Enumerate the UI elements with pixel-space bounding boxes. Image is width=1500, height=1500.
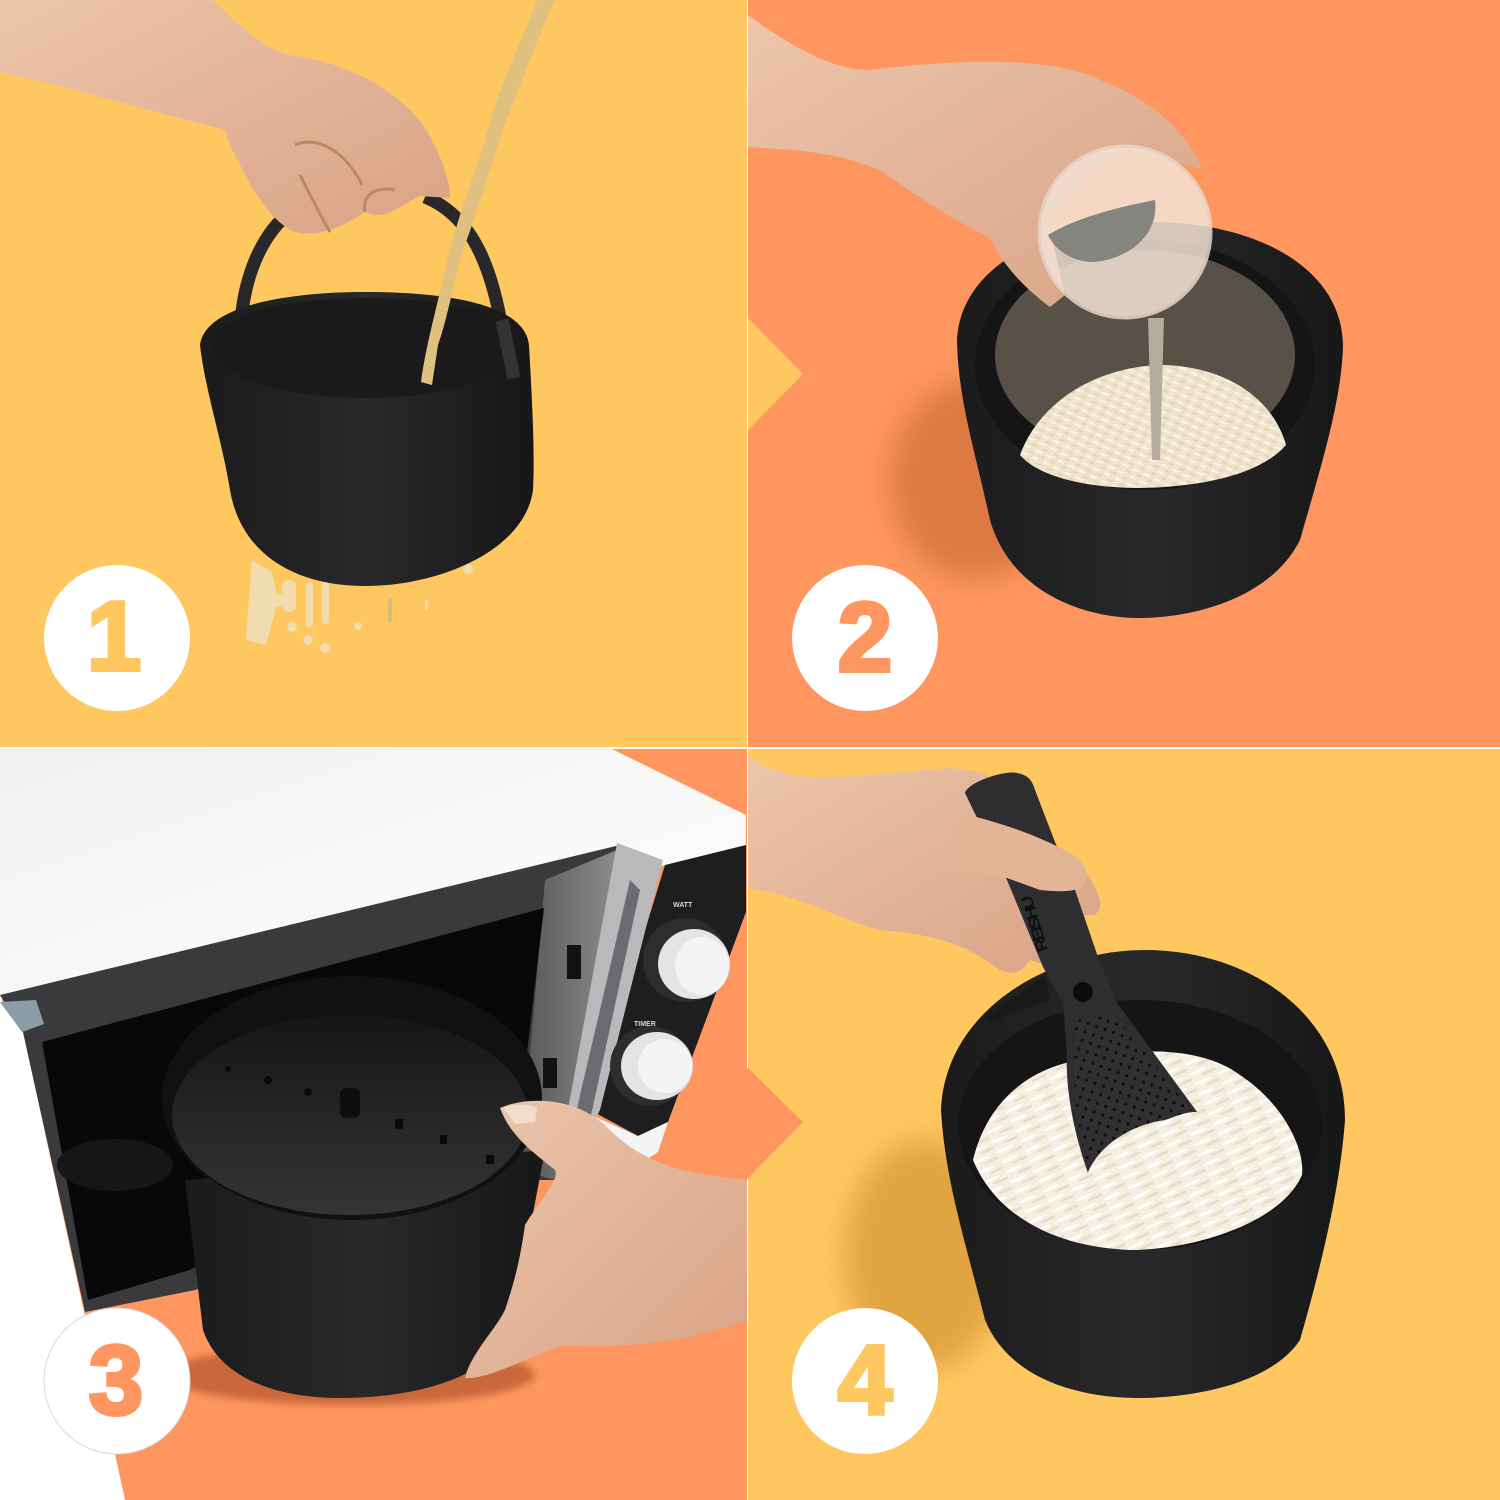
step badge 1 [44,565,190,711]
thumb [955,812,1087,891]
pot body [185,1150,545,1398]
pot shadow [165,1345,535,1405]
door recess [568,880,640,1150]
paddle perforated blade [1074,1015,1195,1165]
upper dial with label [643,902,730,1002]
step badge 4: 4 [838,1325,892,1435]
microwave top surface [0,749,746,1000]
lower dial with label [610,1021,693,1106]
pot lid [162,976,542,1220]
pot shadow [845,1140,1005,1370]
arm and hand [0,0,450,234]
silver door trim [555,843,663,1180]
pot body [957,222,1343,618]
upper dial with label: WATT [673,902,693,909]
illustration: step 4 serving rice [748,755,1345,1398]
illustration: step 3 microwave [0,749,747,1500]
measuring cup [1039,146,1211,318]
step badge 2 [792,565,938,711]
pot interior [212,298,518,398]
cooked rice [973,1051,1302,1250]
water pour [1148,318,1164,460]
panel: step 1 background [0,0,747,747]
step badge 4 [792,1308,938,1454]
step badge 3: 3 [89,1325,143,1435]
step badge 3 [44,1308,190,1454]
step badge 1: 1 [87,581,141,691]
lid knob [340,1088,360,1118]
microwave cavity [42,908,544,1300]
pot interior [975,240,1315,490]
pot tab [985,975,1050,1022]
rice over blade [1088,1112,1240,1230]
arm and hand [748,15,1203,307]
water stream [421,0,555,385]
metal hinge [0,1000,44,1032]
white left side of microwave [0,998,125,1500]
brand on handle: REISHU [1018,894,1051,954]
thumbnail [503,1105,537,1124]
pot interior [958,1000,1322,1250]
arrow: step 3 to step 4 [746,1066,803,1180]
pot body [200,292,534,586]
pot shadow [890,380,1060,580]
panel: step 4 background [748,749,1500,1500]
rice paddle [965,773,1203,1173]
panel: step 2 background [748,0,1500,747]
microwave control panel [590,845,746,1136]
door latch slots [543,945,581,1088]
turntable reflection [57,1139,173,1191]
illustration: step 1 rinsing pot [0,0,555,653]
lower dial with label: TIMER [634,1021,656,1028]
pot handle [241,197,508,376]
water drips [246,560,473,653]
microwave front frame [0,845,620,1312]
pot body [941,950,1345,1398]
white lower control edge [545,1110,668,1190]
step badge 2: 2 [838,582,892,692]
hand [465,1101,747,1378]
back of hand and fingers [748,755,1100,973]
microwave door panel [520,850,617,1180]
lid vent holes [225,1066,494,1164]
finger creases [295,142,395,232]
front handle strap [502,320,514,378]
panel: step 3 background [0,749,747,1500]
arrow: step 1 to step 2 [748,318,803,430]
illustration: step 2 adding water [748,15,1343,618]
paddle hole [1073,982,1093,1002]
rice [1020,365,1286,488]
